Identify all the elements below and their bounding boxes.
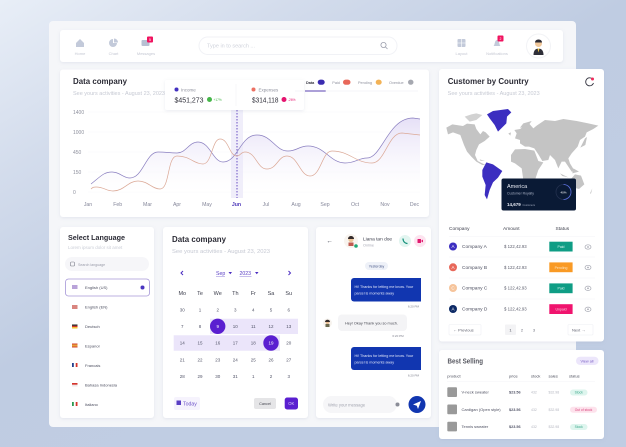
y axis: 0: [73, 190, 76, 196]
map tooltip: america: Customers: [522, 203, 536, 207]
ok button: OK: [288, 401, 295, 406]
date grid: 12: [268, 324, 274, 329]
row: tennis sweater: 432: [531, 425, 537, 429]
y axis: 150: [73, 170, 82, 176]
date grid: 13: [286, 324, 292, 329]
date grid: 10: [233, 324, 238, 329]
panel: chat: [316, 227, 431, 418]
map tooltip: america: [502, 178, 576, 210]
date grid: 9: [216, 324, 219, 329]
language: espanol: [72, 344, 100, 348]
heading: Select Language: [68, 233, 125, 242]
video button: [414, 235, 426, 247]
weekday header: [178, 291, 292, 297]
message input: [323, 396, 400, 413]
map tooltip: america: Customer Royalty: [507, 192, 534, 196]
row: v-neck sweater: $23.56: [509, 390, 521, 394]
date grid: 29: [197, 374, 203, 379]
date grid: 27: [286, 358, 292, 363]
call button: [399, 235, 411, 247]
label: layout: Layout: [455, 51, 468, 56]
language: espanol: Espanol: [85, 344, 100, 348]
icon: chart: [109, 38, 118, 47]
incoming message: [338, 314, 407, 338]
incoming message: Hey! Okay Thank you so much.: [345, 322, 398, 326]
outgoing message 2: parcel is moments away: [354, 360, 394, 364]
navigation bar: [60, 30, 563, 62]
status tabs: Data: [306, 81, 315, 85]
x axis: Mar: [143, 202, 152, 208]
language: deutsch: Deutsch: [85, 324, 100, 329]
row: company c: C: [451, 286, 455, 291]
status tabs: Overdue: [389, 81, 404, 85]
chart subtitle: See yours activities - August 23, 2023: [73, 91, 165, 97]
row: v-neck sweater: V-neck sweater: [462, 390, 490, 394]
row: company c: Company C: [462, 286, 488, 292]
x axis: May: [202, 202, 212, 208]
tooltip: income and expenses: $314,118: [252, 98, 279, 104]
company table: [449, 226, 595, 314]
subtitle: See yours activities - August 23, 2023: [448, 91, 540, 97]
y axis: 1000: [73, 130, 84, 136]
line chart: [91, 110, 420, 198]
tooltip: income and expenses: [165, 80, 304, 110]
row: tennis sweater: Stock: [575, 425, 583, 429]
selected dates: [210, 319, 279, 351]
weekday header: Su: [285, 291, 292, 297]
label: messages: Messages: [137, 51, 155, 56]
table header: sales: [548, 373, 558, 378]
today button: Today: [183, 402, 197, 408]
europe asia africa australia: [508, 119, 598, 194]
date grid: 7: [181, 324, 184, 329]
row: cardigan: $23.56: [509, 408, 521, 412]
row: company a: $ 122,42.93: [504, 244, 527, 249]
date grid: 8: [199, 324, 202, 329]
ok button: [285, 398, 298, 410]
date grid: 23: [215, 358, 221, 363]
row: company d: $ 122,42.93: [504, 307, 527, 312]
date grid: 3: [287, 374, 290, 379]
weekday header: Sa: [268, 291, 275, 297]
y axis: 450: [73, 150, 82, 156]
language: francais: Francais: [85, 363, 100, 368]
pagination: ← Previous: [453, 328, 474, 332]
date grid: 26: [268, 358, 274, 363]
outgoing message 2: 6:20 PM: [408, 374, 419, 378]
row: company b: Pending: [555, 266, 567, 270]
row: company b: Company B: [462, 265, 487, 271]
row: company c: Paid: [557, 287, 565, 291]
language: italiano: Italiano: [85, 402, 99, 407]
x axis: Feb: [113, 202, 122, 208]
x axis: Sep: [320, 202, 330, 208]
x axis: Dec: [410, 202, 420, 208]
weekday header: We: [214, 291, 222, 297]
language: francais: [72, 363, 100, 368]
date grid: 2: [270, 374, 273, 379]
message input: Write your message: [328, 402, 366, 408]
row: cardigan: $32.98: [548, 408, 559, 412]
table header: stock: [531, 373, 540, 378]
icon: notifications: 2: [500, 37, 502, 41]
date grid: 5: [270, 307, 273, 312]
map tooltip: america: 40%: [560, 190, 567, 194]
row: tennis sweater: $32.98: [548, 425, 559, 429]
status tabs: [295, 80, 418, 91]
language: italiano: [72, 402, 99, 407]
date grid: 21: [180, 358, 185, 363]
subtitle: Lorem ipsum dolor sit amet: [68, 245, 123, 250]
cancel button: Cancel: [259, 402, 271, 406]
tooltip: income and expenses: $451,273: [174, 98, 204, 104]
panel: data company chart: [60, 70, 429, 217]
row: company a: Company A: [462, 244, 488, 250]
selected language: english us: English (US): [85, 285, 108, 290]
date grid: 3: [234, 307, 237, 312]
language: bahasa indonesia: Bahasa Indonesia: [85, 382, 118, 388]
tooltip: income and expenses: Income: [181, 87, 196, 92]
row: tennis sweater: [447, 422, 588, 431]
back arrow: ←: [326, 238, 333, 245]
x axis: Jan: [84, 202, 92, 208]
status tabs: Paid: [332, 81, 340, 85]
row: company d: A: [451, 307, 455, 312]
language: bahasa indonesia: [72, 382, 118, 388]
language: deutsch: [72, 324, 100, 329]
x axis: Jul: [263, 202, 269, 208]
date grid: 15: [197, 341, 203, 346]
date pill: Yesterday: [369, 264, 384, 268]
outgoing message 1: [351, 278, 421, 308]
row: company d: Unpaid: [555, 308, 567, 312]
map tooltip: america: America: [507, 184, 528, 190]
row: company b: A: [451, 265, 455, 270]
selected language: english us: [66, 279, 150, 296]
status tabs: Pending: [358, 81, 372, 85]
pagination: 3: [533, 328, 536, 332]
date grid: 17: [233, 341, 238, 346]
icon: notifications: [494, 36, 504, 46]
row: v-neck sweater: 432: [531, 390, 537, 394]
x axis: Oct: [351, 202, 360, 208]
table header: product: [447, 373, 462, 378]
subtitle: See yours activities - August 23, 2023: [172, 249, 270, 255]
table header: [447, 373, 580, 378]
outgoing message 1: Hi! Thanks for letting me know. Your: [354, 285, 414, 289]
date pill: [365, 262, 388, 270]
americas: [446, 109, 511, 199]
row: cardigan: 432: [531, 408, 537, 412]
map tooltip: america: 14,679: [507, 202, 521, 207]
outgoing message 1: 6:20 PM: [408, 304, 419, 308]
row: cardigan: [447, 404, 597, 414]
row: tennis sweater: Tennis sweater: [462, 424, 489, 429]
heading: Data company: [172, 234, 226, 244]
pagination: 2: [521, 328, 524, 332]
pagination: 1: [509, 328, 512, 332]
date grid: 31: [233, 374, 238, 379]
contact status: Online: [363, 244, 374, 248]
tooltip: income and expenses: Expenses: [258, 87, 279, 92]
contact avatar: [344, 234, 358, 248]
tooltip: income and expenses: -26%: [288, 98, 296, 102]
month selector: [181, 271, 290, 277]
row: company c: $ 122,42.93: [504, 286, 527, 291]
panel: calendar: [163, 227, 308, 418]
x axis: Aug: [291, 202, 301, 208]
weekday header: Te: [197, 291, 203, 297]
pagination: [449, 324, 593, 335]
table header: price: [509, 373, 518, 378]
send button: [408, 396, 426, 413]
date grid: 11: [251, 324, 256, 329]
label: chart: Chart: [109, 51, 119, 56]
row: company a: A: [451, 244, 455, 249]
table header: status: [569, 373, 580, 378]
x axis: Jun: [232, 202, 241, 208]
heading: Customer by Country: [448, 76, 529, 86]
row: v-neck sweater: $32.98: [548, 390, 559, 394]
row: v-neck sweater: Stock: [575, 391, 583, 395]
month selector: Sep: [216, 271, 225, 277]
row: tennis sweater: $23.56: [509, 425, 521, 429]
panel: customer by country: [439, 69, 604, 342]
weekday header: Fr: [251, 291, 256, 297]
today button: [174, 397, 200, 410]
icon: layout: [458, 39, 466, 47]
weekday header: Mo: [178, 291, 186, 297]
tooltip: income and expenses: +17%: [214, 98, 222, 102]
date grid: 18: [251, 341, 256, 346]
panel: best selling: [439, 350, 604, 439]
language: english en: [72, 304, 108, 310]
world map: [446, 109, 598, 199]
label: notifications: Notifications: [486, 51, 508, 56]
selected date range: [174, 319, 298, 351]
contact name: Liana tan doe: [363, 236, 392, 242]
company table: Company: [449, 226, 470, 232]
row: company c: [449, 283, 591, 293]
outgoing message 1: parcel is moments away: [354, 292, 394, 296]
view all button: [576, 357, 598, 365]
cancel button: [254, 398, 276, 409]
outgoing message 2: Hi! Thanks for letting me know. Your: [354, 354, 414, 358]
date grid: 24: [233, 358, 238, 363]
date grid: 25: [251, 358, 256, 363]
company table: Amount: [503, 226, 520, 232]
avatar: [526, 34, 550, 58]
date grid: 1: [252, 374, 255, 379]
date grid: [180, 307, 292, 379]
sender avatar: [323, 318, 332, 328]
y axis: [73, 110, 84, 196]
incoming message: 6:20 PM: [392, 334, 404, 338]
weekday header: Th: [232, 291, 239, 297]
x axis: Apr: [173, 202, 181, 208]
icon: home: [76, 39, 84, 47]
language search: [65, 257, 149, 271]
date grid: 14: [180, 341, 185, 346]
date grid: 28: [180, 374, 185, 379]
language search: Search language: [78, 263, 105, 267]
pagination: Next →: [572, 328, 585, 332]
date grid: 30: [215, 374, 221, 379]
month selector: 2023: [240, 271, 251, 277]
row: company a: [449, 242, 591, 252]
panel: select language: [60, 227, 154, 418]
icon: messages: 5: [149, 38, 151, 42]
x axis: [84, 202, 420, 208]
date grid: 19: [268, 341, 274, 346]
row: company a: Paid: [557, 245, 565, 249]
row: cardigan: Out of stock: [575, 408, 593, 412]
date grid: 6: [287, 307, 290, 312]
language: english en: English (EN): [85, 304, 108, 310]
row: company b: [449, 262, 591, 272]
search bar: [199, 37, 397, 54]
date grid: 1: [199, 307, 202, 312]
row: company b: $ 122,42.93: [504, 265, 527, 270]
main dashboard panel: [49, 21, 576, 427]
date grid: 20: [286, 341, 292, 346]
date grid: 2: [216, 307, 219, 312]
chart heading: Data company: [73, 76, 127, 86]
row: v-neck sweater: [447, 387, 588, 397]
date grid: 30: [180, 307, 185, 312]
row: cardigan: Cardigan (Open style): [462, 407, 501, 412]
company table: Status: [556, 226, 570, 232]
label: home: Home: [75, 51, 86, 56]
row: company d: [449, 304, 591, 314]
icon: messages: [142, 36, 153, 46]
search bar: Type in to search ...: [207, 44, 255, 50]
view all button: View all: [580, 359, 594, 363]
date grid: 4: [252, 307, 255, 312]
heading: Best Selling: [448, 358, 483, 366]
date grid: 16: [215, 341, 221, 346]
x axis: Nov: [380, 202, 390, 208]
date grid: 22: [197, 358, 203, 363]
icon: refresh alert: [586, 78, 594, 86]
y axis: 1400: [73, 110, 84, 116]
row: company d: Company D: [462, 307, 488, 313]
outgoing message 2: [351, 347, 421, 378]
